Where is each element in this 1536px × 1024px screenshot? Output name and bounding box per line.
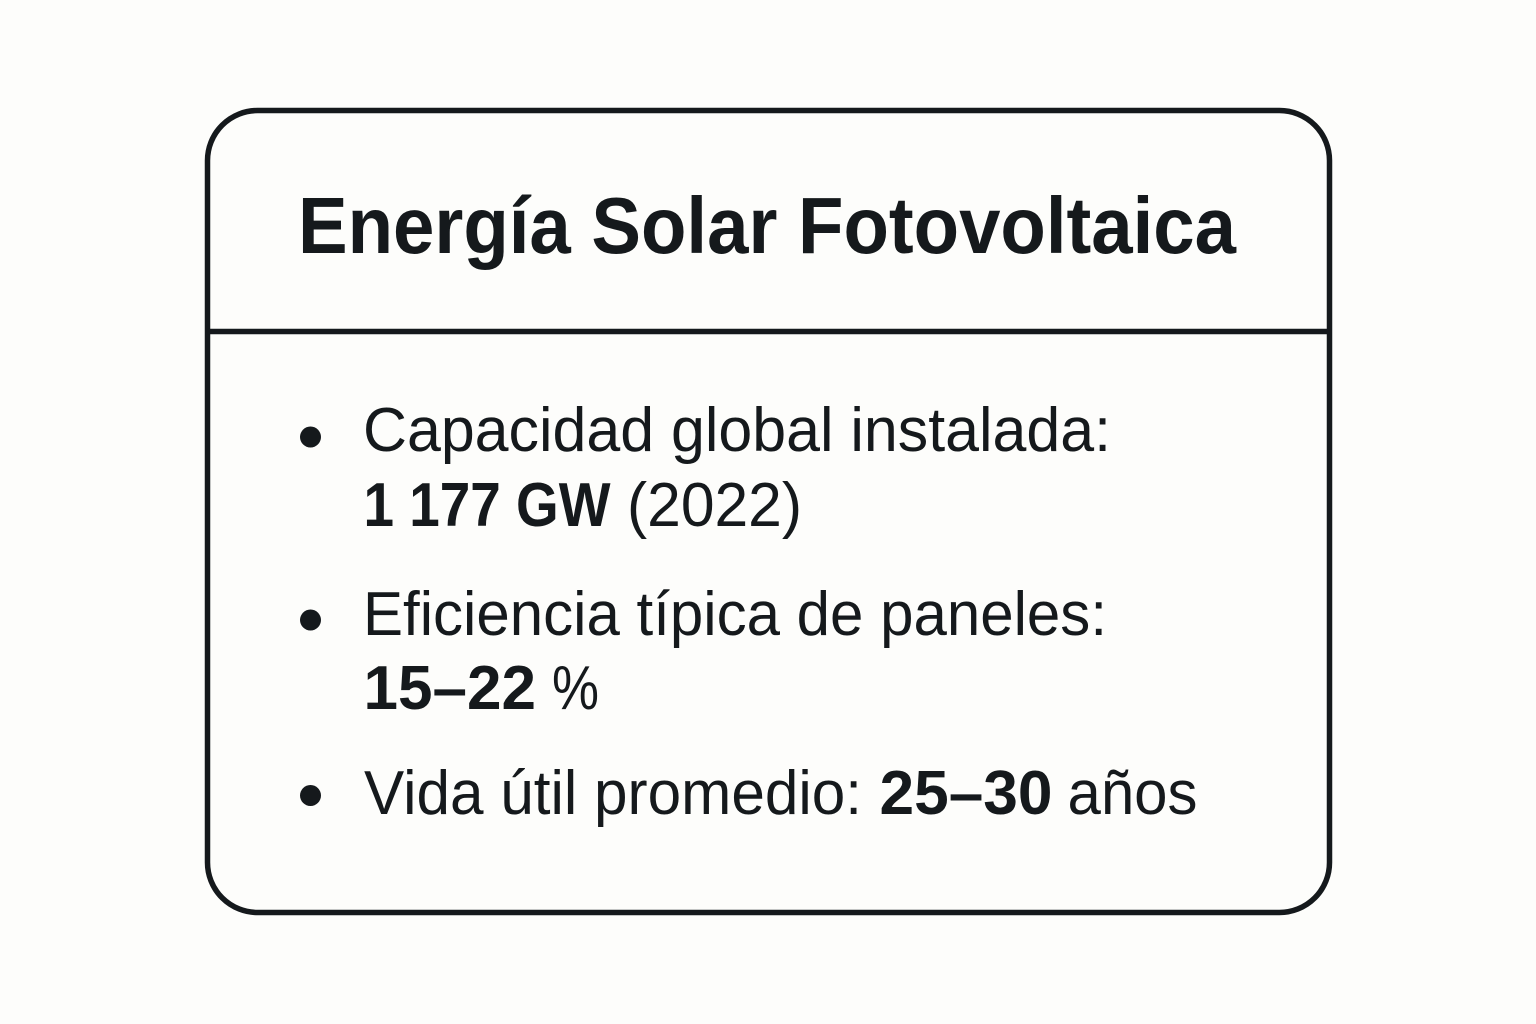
bullet: panel efficiency: Eficiencia típica de paneles: bbox=[363, 580, 1107, 649]
bullet: average lifespan: años bbox=[1068, 759, 1198, 828]
bullet: panel efficiency bbox=[300, 580, 1107, 723]
bullet: panel efficiency: % bbox=[552, 654, 599, 723]
bullet: average lifespan bbox=[300, 759, 1198, 828]
title: Energía Solar Fotovoltaica bbox=[298, 181, 1236, 270]
bullet: installed capacity: 1 177 GW bbox=[364, 471, 611, 540]
panel: solar energy card bbox=[208, 110, 1330, 912]
bullet: average lifespan: 25–30 bbox=[880, 759, 1052, 828]
bullet: installed capacity: (2022) bbox=[627, 471, 802, 540]
bullet: average lifespan: Vida útil promedio: bbox=[364, 759, 862, 828]
bullet: installed capacity bbox=[300, 396, 1111, 540]
bullet: panel efficiency: 15–22 bbox=[364, 654, 536, 723]
bullet: installed capacity: Capacidad global instalada: bbox=[363, 396, 1111, 465]
